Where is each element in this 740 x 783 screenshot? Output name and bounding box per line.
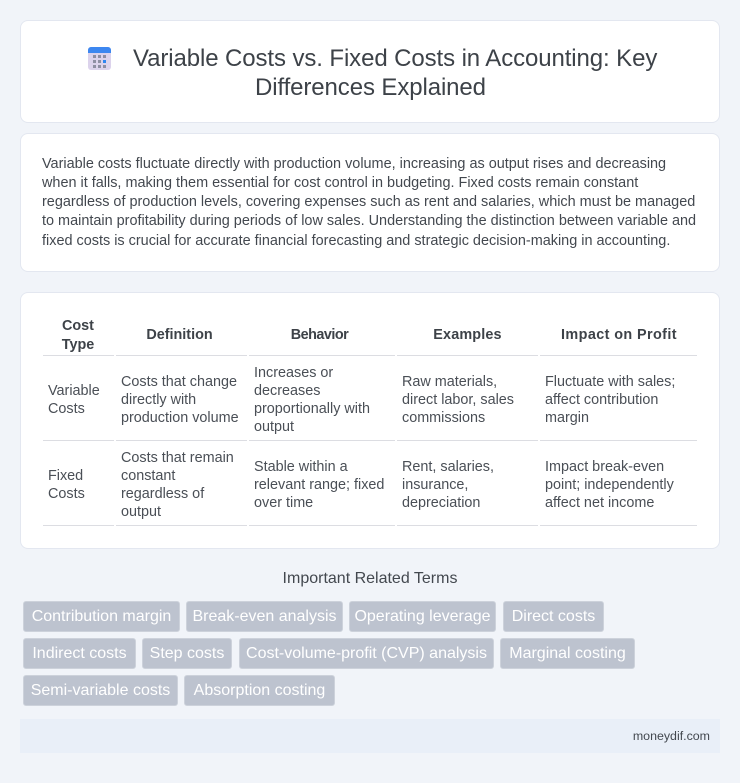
text block: intro: to maintain profitability during periods of low sales. Understanding the distinction between variable and — [42, 213, 696, 229]
table row: variable costs: direct labor, sales — [402, 392, 514, 408]
table row: fixed costs: regardless of — [121, 486, 204, 502]
heading: related terms: Important Related Terms — [283, 570, 457, 587]
table header: Cost — [62, 318, 94, 334]
table row: variable costs: directly with — [121, 392, 196, 408]
tag list: related terms: Step costs — [150, 645, 224, 662]
table row: variable costs: margin — [545, 410, 589, 426]
text block: intro: Variable costs fluctuate directly with production volume, increasing as output rises and decreasing — [42, 156, 666, 172]
text block: intro — [42, 156, 696, 249]
tag list: related terms: Break-even analysis — [192, 608, 337, 625]
title: Differences Explained — [255, 74, 486, 101]
panel: comparison table — [20, 292, 720, 549]
table header: Definition — [146, 327, 213, 343]
table row: fixed costs: affect net income — [545, 495, 654, 511]
text block: intro: when it falls, making them essential for cost control in budgeting. Fixed costs remain constant — [42, 175, 638, 191]
table row: fixed costs: point; independently — [545, 477, 674, 493]
table row: variable costs: production volume — [121, 410, 239, 426]
tag list: related terms: Operating leverage — [354, 608, 491, 625]
table row: fixed costs: relevant range; fixed — [254, 477, 384, 493]
tag list: related terms: Semi-variable costs — [31, 682, 170, 699]
table row: fixed costs: Stable within a — [254, 459, 348, 475]
title: Variable Costs vs. Fixed Costs in Accounting: Key — [133, 45, 657, 72]
table row: variable costs: decreases — [254, 383, 320, 399]
text block: intro: fixed costs is crucial for accurate financial forecasting and strategic decision-making in accounting. — [42, 233, 670, 249]
table row: variable costs: commissions — [402, 410, 485, 426]
tag list: related terms: Contribution margin — [32, 608, 171, 625]
table row: fixed costs: Rent, salaries, — [402, 459, 494, 475]
table header: Impact on Profit — [561, 327, 677, 343]
table row: variable costs: Increases or — [254, 365, 333, 381]
table row: variable costs: Raw materials, — [402, 374, 497, 390]
table row: fixed costs: over time — [254, 495, 313, 511]
table row: fixed costs: constant — [121, 468, 175, 484]
table header: Behavior — [291, 327, 348, 343]
footer bar — [20, 719, 720, 753]
icon: calendar — [88, 47, 111, 70]
footer source: moneydif.com — [633, 729, 710, 743]
table row: variable costs: Fluctuate with sales; — [545, 374, 675, 390]
table row: variable costs: Costs that change — [121, 374, 237, 390]
table row: fixed costs: Costs — [48, 486, 85, 502]
table row: fixed costs: insurance, — [402, 477, 468, 493]
table row: fixed costs: Impact break-even — [545, 459, 664, 475]
tag list: related terms: Absorption costing — [194, 682, 325, 699]
table row: variable costs: Costs — [48, 401, 85, 417]
table row: fixed costs — [48, 450, 674, 520]
table row: variable costs: output — [254, 419, 294, 435]
text block: intro: regardless of production levels, covering expenses such as rent and salaries, which must be managed — [42, 194, 695, 210]
panel: title card — [20, 20, 720, 123]
tag list: related terms: Indirect costs — [32, 645, 127, 662]
table row: fixed costs: Costs that remain — [121, 450, 234, 466]
table header: Examples — [433, 327, 502, 343]
table row: variable costs: affect contribution — [545, 392, 658, 408]
table row: fixed costs: output — [121, 504, 161, 520]
table header: Type — [62, 337, 94, 353]
tag list: related terms: Marginal costing — [509, 645, 626, 662]
table row: fixed costs: Fixed — [48, 468, 83, 484]
tag list: related terms — [23, 601, 635, 706]
table row: variable costs — [48, 365, 675, 435]
table row: variable costs: Variable — [48, 383, 100, 399]
table row: fixed costs: depreciation — [402, 495, 480, 511]
tag list: related terms: Cost-volume-profit (CVP) analysis — [246, 645, 487, 662]
tag list: related terms: Direct costs — [512, 608, 595, 625]
table header — [62, 318, 677, 353]
panel: intro paragraph — [20, 133, 720, 272]
title — [133, 45, 658, 101]
table row: variable costs: proportionally with — [254, 401, 370, 417]
